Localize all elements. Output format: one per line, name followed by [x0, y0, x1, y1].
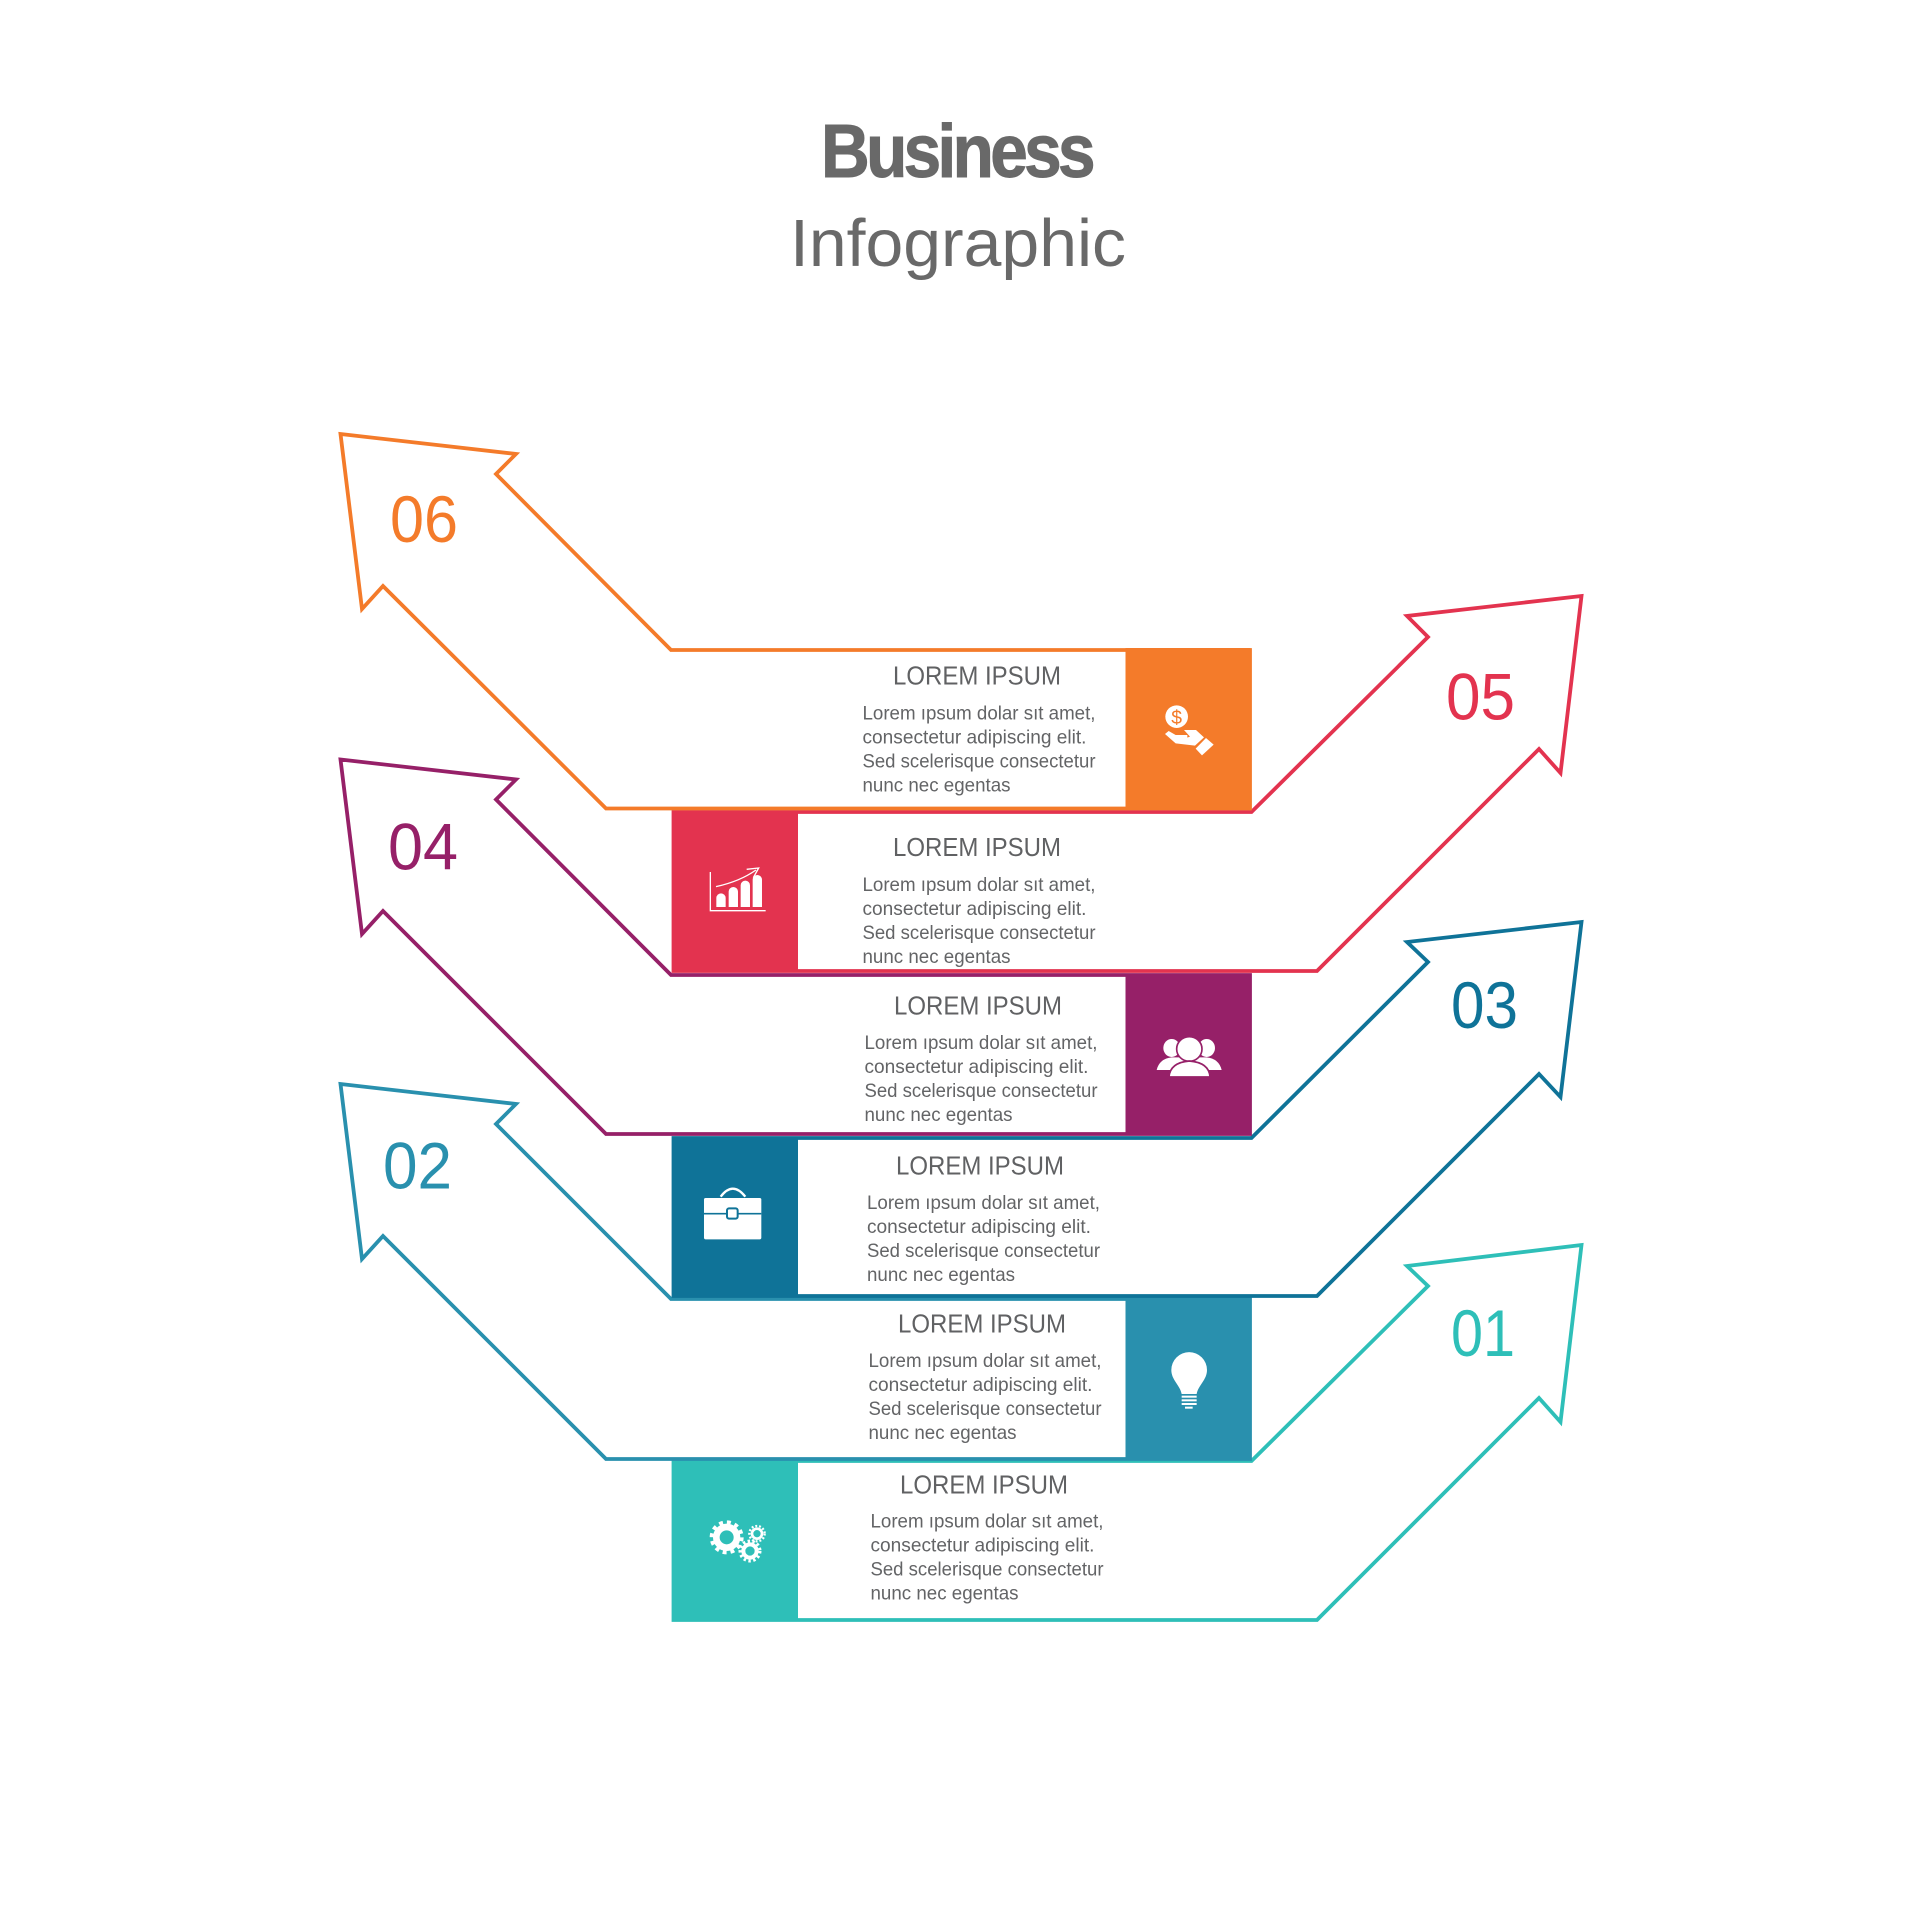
panel: step 06	[340, 434, 1250, 810]
body text 01: consectetur adipiscing elit.	[870, 1534, 1094, 1556]
number 01: 01	[1451, 1296, 1515, 1370]
body text 05: Sed scelerisque consectetur	[862, 922, 1096, 944]
heading 01: LOREM IPSUM	[900, 1470, 1068, 1500]
colour block 03	[673, 1138, 798, 1296]
body text 02: consectetur adipiscing elit.	[868, 1374, 1092, 1396]
icon: hand with coin	[1165, 705, 1214, 755]
body text 05: nunc nec egentas	[862, 946, 1011, 968]
body text 05	[862, 874, 1096, 968]
body text 05: Lorem ıpsum dolar sıt amet,	[862, 874, 1096, 896]
arrow outline 06	[340, 434, 1250, 808]
arrow outline 05	[674, 596, 1582, 971]
icon: growth chart	[710, 868, 766, 911]
body text 02: Sed scelerisque consectetur	[868, 1398, 1102, 1420]
body text 03: consectetur adipiscing elit.	[867, 1216, 1091, 1238]
icon: light bulb	[1171, 1352, 1207, 1409]
icon: gears	[712, 1522, 765, 1561]
body text 03	[867, 1192, 1100, 1286]
colour block 02	[1126, 1298, 1250, 1459]
body text 03: nunc nec egentas	[867, 1264, 1015, 1286]
arrow outline 01	[674, 1245, 1582, 1620]
number 03: 03	[1451, 968, 1518, 1042]
icon: briefcase	[704, 1189, 761, 1239]
heading 03: LOREM IPSUM	[896, 1150, 1064, 1180]
body text 01: Lorem ıpsum dolar sıt amet,	[870, 1510, 1104, 1532]
body text 04	[864, 1032, 1098, 1126]
title	[790, 110, 1126, 281]
heading 06: LOREM IPSUM	[893, 660, 1061, 690]
heading 05: LOREM IPSUM	[893, 832, 1061, 862]
body text 04: consectetur adipiscing elit.	[864, 1056, 1088, 1078]
panel: step 04	[340, 760, 1250, 1135]
icon: hand with coin: $	[1171, 708, 1182, 729]
body text 06: Lorem ıpsum dolar sıt amet,	[862, 702, 1096, 724]
number 06: 06	[390, 482, 458, 556]
body text 06: nunc nec egentas	[862, 774, 1011, 796]
body text 03: Sed scelerisque consectetur	[867, 1240, 1100, 1262]
body text 05: consectetur adipiscing elit.	[862, 898, 1086, 920]
title: Infographic	[790, 206, 1126, 281]
body text 01: nunc nec egentas	[870, 1582, 1019, 1604]
colour block 05	[673, 811, 798, 972]
title: Business	[821, 110, 1096, 194]
panel: step 05	[673, 596, 1582, 972]
heading 04: LOREM IPSUM	[894, 990, 1062, 1020]
number 05: 05	[1446, 660, 1515, 734]
number 02: 02	[383, 1128, 452, 1202]
body text 04: Lorem ıpsum dolar sıt amet,	[864, 1032, 1098, 1054]
body text 06	[862, 702, 1096, 796]
body text 01: Sed scelerisque consectetur	[870, 1558, 1104, 1580]
body text 02: Lorem ıpsum dolar sıt amet,	[868, 1350, 1102, 1372]
colour block 01	[673, 1462, 798, 1622]
body text 04: Sed scelerisque consectetur	[864, 1080, 1098, 1102]
body text 06: consectetur adipiscing elit.	[862, 726, 1086, 748]
body text 02	[868, 1350, 1102, 1444]
arrow outline 02	[340, 1084, 1250, 1459]
body text 03: Lorem ıpsum dolar sıt amet,	[867, 1192, 1100, 1214]
arrow outline 04	[340, 760, 1250, 1134]
heading 02: LOREM IPSUM	[898, 1308, 1066, 1338]
panel: step 02	[340, 1084, 1250, 1459]
body text 06: Sed scelerisque consectetur	[862, 750, 1096, 772]
panel: step 01	[673, 1245, 1582, 1622]
colour block 04	[1126, 974, 1250, 1135]
colour block 06	[1126, 648, 1250, 810]
body text 04: nunc nec egentas	[864, 1104, 1013, 1126]
body text 02: nunc nec egentas	[868, 1422, 1017, 1444]
arrow outline 03	[674, 922, 1582, 1296]
icon: people	[1157, 1037, 1222, 1077]
body text 01	[870, 1510, 1104, 1604]
panel: step 03	[673, 922, 1582, 1296]
number 04: 04	[388, 810, 458, 884]
